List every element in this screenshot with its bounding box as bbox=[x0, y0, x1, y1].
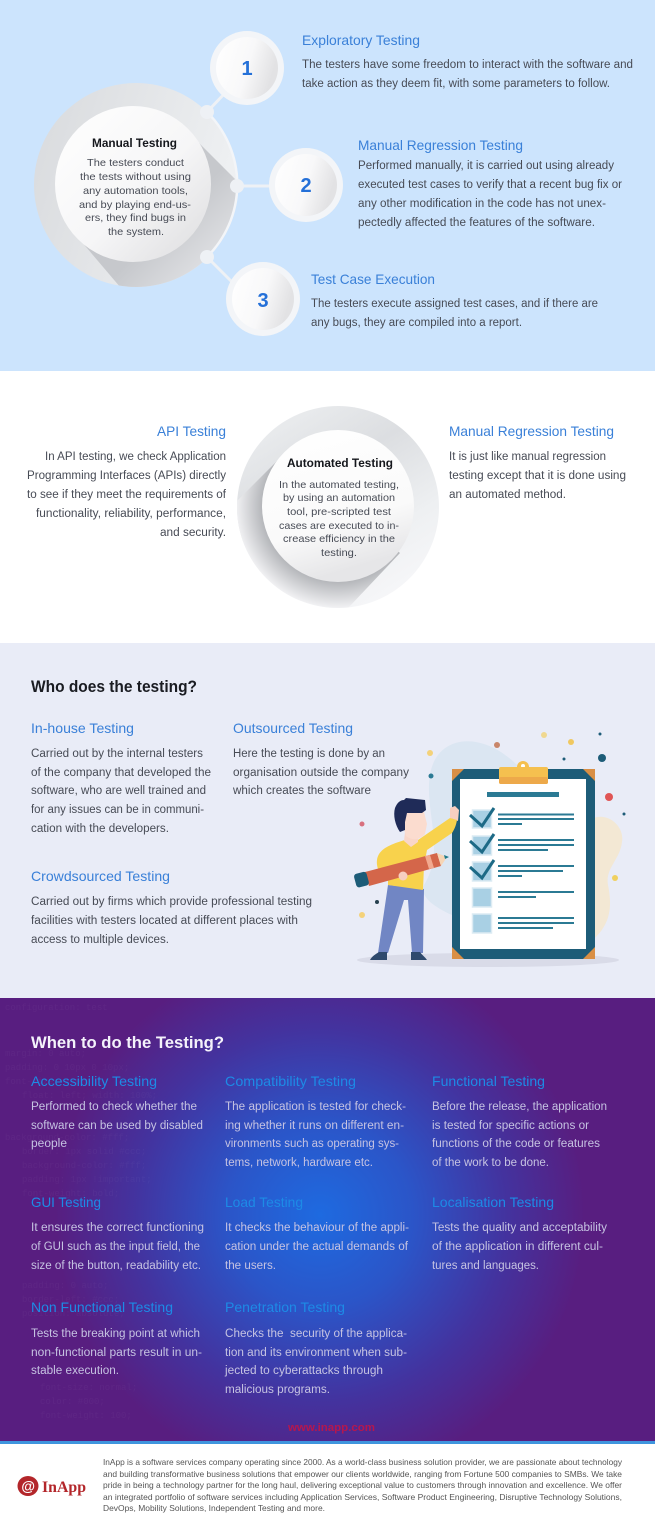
logo: InApp bbox=[18, 1476, 86, 1496]
text block: automated regression testing bbox=[449, 423, 626, 501]
background code texture: font-size: 16px; bbox=[5, 1077, 91, 1087]
badge 2 bbox=[269, 148, 343, 222]
text block: outsourced testing: organisation outside the company bbox=[233, 767, 409, 779]
text block: non functional testing: Tests the breaking point at which bbox=[31, 1328, 200, 1340]
text block: accessibility testing: people bbox=[31, 1138, 67, 1150]
lower hand bbox=[398, 872, 408, 880]
footer company description: an integrated portfolio of software services including Application Services, Software Product Engineering, Disruptive Technology Solutions, bbox=[103, 1492, 622, 1502]
section background: footer bbox=[0, 1442, 655, 1536]
text block: non functional testing: stable execution. bbox=[31, 1365, 119, 1377]
hub text: by using an automation bbox=[283, 492, 395, 504]
text block: GUI testing: It ensures the correct functioning bbox=[31, 1222, 204, 1234]
logo mark: @ bbox=[21, 1478, 35, 1494]
text block: in-house testing: cation with the developers. bbox=[31, 823, 169, 835]
text block: penetration testing bbox=[224, 1299, 407, 1396]
text block: load testing bbox=[225, 1194, 409, 1272]
hub text: the system. bbox=[108, 226, 164, 238]
text block: test case execution: The testers execute assigned test cases, and if there are bbox=[311, 298, 598, 310]
text block: automated regression testing: testing except that it is done using bbox=[449, 470, 626, 482]
text block: compatibility testing: Compatibility Testing bbox=[225, 1073, 356, 1089]
text block: penetration testing: Penetration Testing bbox=[225, 1299, 345, 1315]
text block: manual regression testing: Performed manually, it is carried out using already bbox=[358, 160, 614, 172]
background code texture: font-size: normal; bbox=[40, 1383, 137, 1393]
text block: outsourced testing: which creates the software bbox=[232, 785, 371, 797]
text block: test case execution bbox=[311, 271, 598, 329]
text block: API testing: Programming Interfaces (APIs) directly bbox=[27, 470, 226, 482]
text block: in-house testing: In-house Testing bbox=[31, 720, 134, 736]
hub rim arc bbox=[207, 112, 237, 257]
text block: exploratory testing: The testers have some freedom to interact with the software and bbox=[302, 59, 633, 71]
text block: automated regression testing: Manual Regression Testing bbox=[449, 423, 614, 439]
beige blob bbox=[590, 817, 622, 942]
neck bbox=[404, 832, 418, 847]
footer company description bbox=[103, 1457, 623, 1513]
hub outer disc bbox=[237, 406, 439, 608]
checklist lines bbox=[498, 814, 574, 929]
hub text: cases are executed to in- bbox=[279, 520, 400, 532]
blue blob bbox=[423, 741, 520, 915]
hub text: the tests without using bbox=[80, 171, 191, 183]
heading: when to do the testing: When to do the Testing? bbox=[31, 1033, 224, 1052]
connectors bbox=[207, 92, 272, 282]
hub text: and by playing end-us- bbox=[79, 199, 192, 211]
hub outer disc bbox=[34, 83, 238, 287]
text block: exploratory testing bbox=[302, 32, 633, 90]
text block: penetration testing: Checks the security of the applica- bbox=[225, 1328, 407, 1340]
text block: GUI testing: GUI Testing bbox=[31, 1194, 101, 1210]
text block: localisation testing: Localisation Testing bbox=[432, 1194, 554, 1210]
text block: exploratory testing: Exploratory Testing bbox=[302, 32, 420, 48]
background code texture: padding: 0 auto; bbox=[22, 1281, 108, 1291]
hub inner disc bbox=[55, 106, 211, 262]
background code texture: font-weight: bold; bbox=[22, 1189, 119, 1199]
hub text: Manual Testing bbox=[92, 136, 177, 150]
text block: non functional testing: non-functional parts result in un- bbox=[31, 1347, 202, 1359]
hub text: crease efficiency in the bbox=[283, 533, 395, 545]
background code texture: border-left: #ccc; bbox=[22, 1295, 119, 1305]
clipboard corners bbox=[452, 769, 595, 959]
text block: manual regression testing: executed test cases to verify that a recent bug fix or bbox=[358, 179, 622, 191]
hub long shadow bbox=[237, 462, 400, 606]
logo wordmark: InApp bbox=[42, 1479, 86, 1496]
background code texture: padding: 0 10px 0 10px; bbox=[5, 1063, 129, 1073]
text block: localisation testing: tures and languages. bbox=[432, 1260, 539, 1272]
ground shadow bbox=[357, 953, 619, 967]
text block: in-house testing: for any issues can be in communi- bbox=[31, 804, 204, 816]
text block: compatibility testing bbox=[225, 1073, 406, 1169]
text block: manual regression testing: pectedly affected the features of the software. bbox=[358, 217, 595, 229]
clipboard clip bbox=[499, 761, 548, 784]
text block: API testing: In API testing, we check Application bbox=[45, 451, 226, 463]
text block: crowdsourced testing: Carried out by firms which provide professional testing bbox=[31, 896, 312, 908]
text block: crowdsourced testing: access to multiple devices. bbox=[31, 934, 169, 946]
legs bbox=[378, 885, 424, 953]
node bottom bbox=[200, 250, 214, 264]
text block: manual regression testing bbox=[358, 137, 622, 229]
text block: localisation testing bbox=[432, 1194, 607, 1272]
hub text: Automated Testing bbox=[287, 456, 393, 470]
text block: functional testing: Functional Testing bbox=[432, 1073, 545, 1089]
text block: non functional testing bbox=[31, 1299, 202, 1377]
text block: non functional testing: Non Functional Testing bbox=[31, 1299, 173, 1315]
text block: API testing bbox=[27, 423, 227, 539]
text block: outsourced testing: Here the testing is done by an bbox=[233, 748, 385, 760]
text block: functional testing: is tested for specific actions or bbox=[432, 1120, 589, 1132]
diagram: manual testing hub bbox=[34, 83, 269, 287]
text block: API testing: and security. bbox=[160, 527, 226, 539]
clipboard board bbox=[452, 769, 595, 959]
background code texture: padding: 1px !important; bbox=[22, 1175, 152, 1185]
text block: compatibility testing: ing whether it runs on different en- bbox=[225, 1120, 404, 1132]
text block: in-house testing: software, who are well trained and bbox=[31, 785, 206, 797]
text block: test case execution: any bugs, they are compiled into a report. bbox=[311, 317, 522, 329]
text block: outsourced testing bbox=[232, 720, 409, 797]
node top bbox=[200, 105, 214, 119]
person bbox=[353, 798, 459, 960]
section background: automated testing bbox=[0, 371, 655, 643]
text block: manual regression testing: any other modification in the code has not unex- bbox=[358, 198, 606, 210]
sweater bbox=[377, 818, 457, 890]
node middle bbox=[230, 179, 244, 193]
text block: in-house testing bbox=[31, 720, 211, 835]
footer company description: DevOps, Mobility Solutions, Independent Testing and more. bbox=[103, 1503, 325, 1513]
text block: outsourced testing: Outsourced Testing bbox=[233, 720, 353, 736]
background code texture: float: left; width: 100%; bbox=[22, 1091, 157, 1101]
hub text: testing. bbox=[321, 547, 357, 559]
text block: test case execution: Test Case Execution bbox=[311, 271, 435, 287]
shoes bbox=[370, 952, 427, 960]
section background: manual testing bbox=[0, 0, 655, 371]
hub text: The testers conduct bbox=[87, 157, 184, 169]
text block: load testing: It checks the behaviour of the appli- bbox=[225, 1222, 409, 1234]
footer accent line bbox=[0, 1441, 655, 1444]
background code texture: margin: 0 auto; bbox=[5, 1049, 86, 1059]
text block: functional testing: of the work to be done. bbox=[432, 1157, 549, 1169]
background code texture bbox=[5, 1003, 157, 1421]
illustration: person with clipboard bbox=[353, 732, 626, 967]
text block: GUI testing: size of the button, readability etc. bbox=[31, 1260, 201, 1272]
text block: crowdsourced testing: Crowdsourced Testing bbox=[31, 868, 170, 884]
background code texture: color: #000; bbox=[40, 1397, 105, 1407]
hub text: tool, pre-scripted test bbox=[287, 506, 391, 518]
text block: in-house testing: of the company that developed the bbox=[31, 767, 211, 779]
badge 3 bbox=[226, 262, 300, 336]
text block: load testing: Load Testing bbox=[225, 1194, 303, 1210]
text block: load testing: the users. bbox=[225, 1260, 276, 1272]
background code texture: font-weight: 100; bbox=[40, 1411, 132, 1421]
hub text bbox=[279, 456, 400, 559]
face bbox=[403, 812, 427, 839]
text block: compatibility testing: tems, network, hardware etc. bbox=[225, 1157, 373, 1169]
text block: accessibility testing: software can be used by disabled bbox=[31, 1120, 203, 1132]
hub long shadow bbox=[84, 144, 236, 287]
text block: GUI testing: of GUI such as the input field, the bbox=[31, 1241, 200, 1253]
text block: accessibility testing: Performed to check whether the bbox=[31, 1101, 197, 1113]
checkboxes bbox=[472, 810, 492, 933]
background code texture: position: absolute; bbox=[22, 1309, 125, 1319]
text block: penetration testing: jected to cyberattacks through bbox=[224, 1365, 383, 1377]
badge 2: 2 bbox=[300, 175, 312, 197]
text block: crowdsourced testing bbox=[31, 868, 312, 946]
section background: when to do the testing bbox=[0, 998, 655, 1442]
pencil bbox=[353, 853, 449, 888]
text block: compatibility testing: vironments such as operating sys- bbox=[225, 1138, 399, 1150]
section background: who does the testing bbox=[0, 643, 655, 998]
background code texture: configuration: test bbox=[5, 1003, 108, 1013]
text block: load testing: cation under the actual demands of bbox=[225, 1241, 409, 1253]
paper title bar bbox=[487, 792, 559, 797]
text block: accessibility testing bbox=[31, 1073, 203, 1150]
hub text bbox=[79, 136, 192, 238]
text block: API testing: to see if they meet the requirements of bbox=[27, 489, 227, 501]
confetti dots bbox=[359, 732, 626, 918]
text block: penetration testing: tion and its environment when sub- bbox=[225, 1347, 407, 1359]
text block: API testing: API Testing bbox=[157, 423, 226, 439]
text block: functional testing: Before the release, the application bbox=[432, 1101, 607, 1113]
text block: functional testing: functions of the code or features bbox=[432, 1138, 600, 1150]
text block: localisation testing: Tests the quality and acceptability bbox=[432, 1222, 607, 1234]
text block: API testing: functionality, reliability, performance, bbox=[36, 508, 226, 520]
hub text: ers, they find bugs in bbox=[85, 212, 186, 224]
badge 1 bbox=[210, 31, 284, 105]
background code texture: border: 1px solid #ccc; bbox=[22, 1147, 146, 1157]
text block: GUI testing bbox=[31, 1194, 204, 1272]
text block: penetration testing: malicious programs. bbox=[225, 1384, 330, 1396]
text block: automated regression testing: an automated method. bbox=[449, 489, 566, 501]
text block: localisation testing: of the application in different cul- bbox=[432, 1241, 603, 1253]
footer company description: InApp is a software services company operating since 2000. As a world-class business solution provider, we are passionate about technology bbox=[103, 1457, 623, 1467]
clipboard paper bbox=[460, 779, 586, 949]
text block: accessibility testing: Accessibility Testing bbox=[31, 1073, 157, 1089]
text block: compatibility testing: The application is tested for check- bbox=[225, 1101, 406, 1113]
ear bbox=[398, 816, 406, 824]
hub text: In the automated testing, bbox=[279, 479, 399, 491]
badge 1: 1 bbox=[241, 58, 253, 80]
hub inner disc bbox=[262, 430, 414, 582]
text block: automated regression testing: It is just like manual regression bbox=[449, 451, 606, 463]
footer company description: and building transformative business solutions that empower our clients worldwide, ranging from Fortune 500 companies to SMBs. We take bbox=[103, 1469, 622, 1479]
check marks bbox=[470, 808, 494, 878]
raised hand bbox=[450, 806, 459, 821]
diagram: automated testing hub bbox=[237, 406, 439, 608]
text block: functional testing bbox=[432, 1073, 607, 1169]
text block: manual regression testing: Manual Regression Testing bbox=[358, 137, 523, 153]
hair bbox=[394, 798, 426, 832]
website link: www.inapp.com bbox=[287, 1422, 375, 1434]
footer company description: pride in being a technology partner for the long haul, delivering exceptional value to customers through innovation and excellence. We offer bbox=[103, 1480, 622, 1490]
hub text: any automation tools, bbox=[83, 185, 188, 197]
badge 3: 3 bbox=[257, 290, 269, 312]
text block: in-house testing: Carried out by the internal testers bbox=[31, 748, 203, 760]
text block: exploratory testing: take action as they deem fit, with some parameters to follow. bbox=[302, 78, 610, 90]
background code texture: background-color: #fff; bbox=[5, 1133, 129, 1143]
heading: who does the testing: Who does the testing? bbox=[31, 677, 197, 696]
text block: crowdsourced testing: facilities with testers located at different places with bbox=[31, 915, 298, 927]
background code texture: background-color: #fff; bbox=[22, 1161, 146, 1171]
